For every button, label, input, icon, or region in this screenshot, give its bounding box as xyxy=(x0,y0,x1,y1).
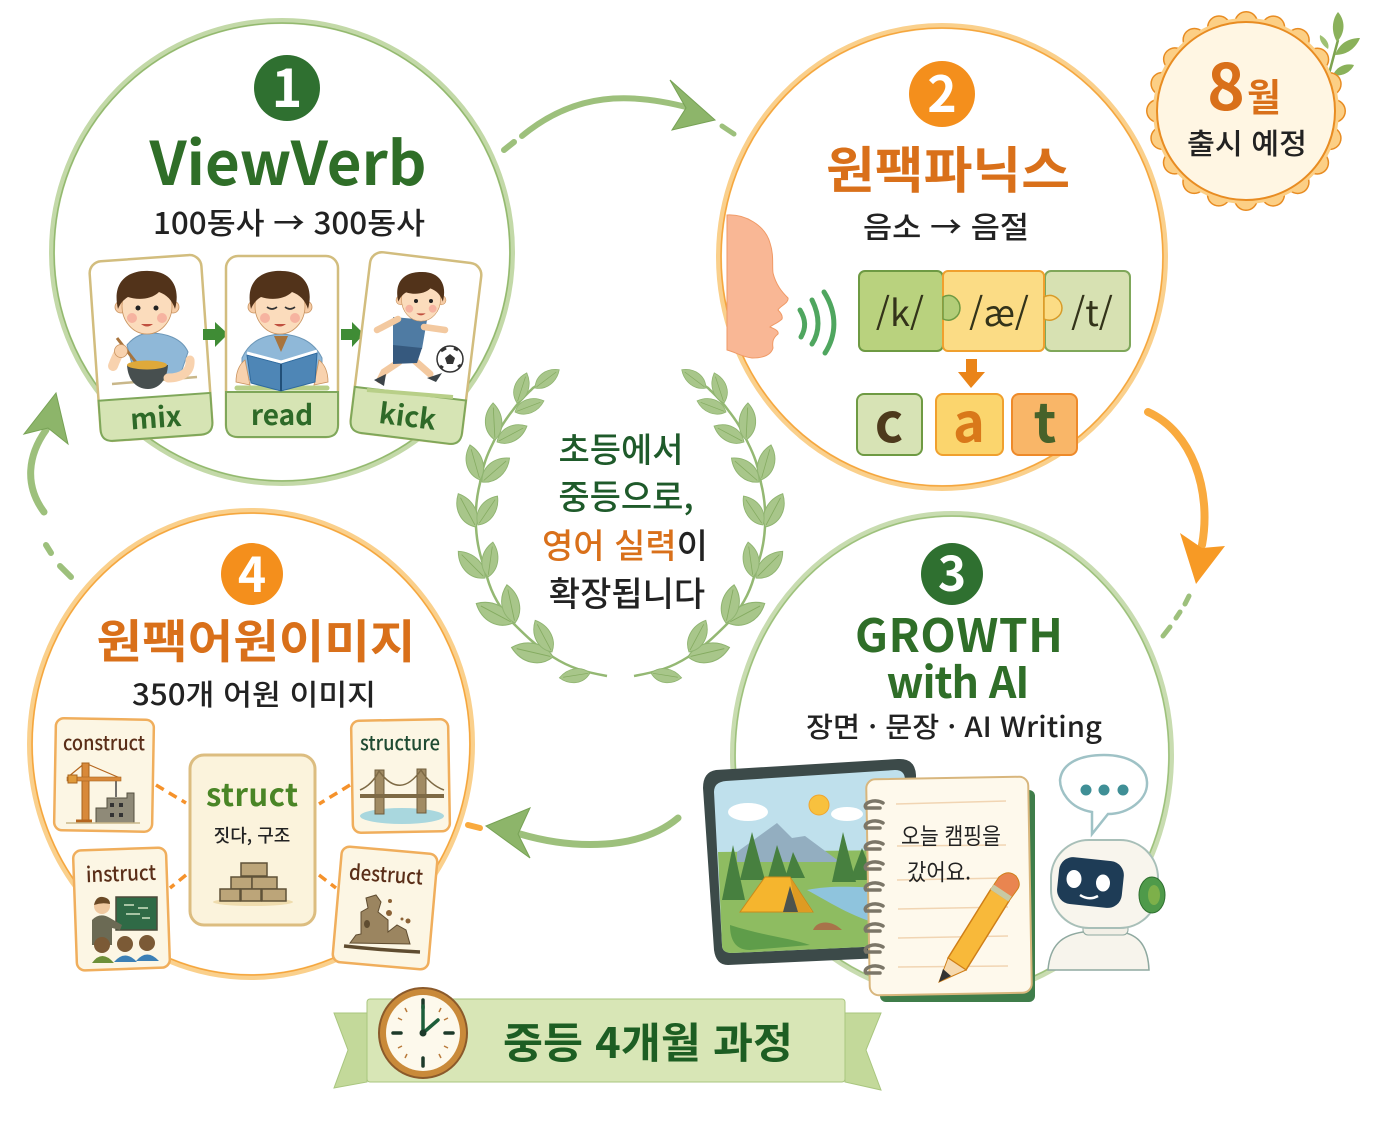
icon: badge leaves xyxy=(1320,12,1360,85)
icon: bricks xyxy=(213,863,293,906)
arrow: phoneme to letter xyxy=(958,359,985,388)
tile: a: a xyxy=(953,379,985,458)
center message: 영어 실력이 xyxy=(542,519,708,568)
card: construct xyxy=(54,718,154,832)
banner: course length xyxy=(334,988,881,1090)
icon: crane and building xyxy=(66,763,140,823)
step 4 subtitle: 350개 어원 이미지 xyxy=(132,672,376,714)
card: read xyxy=(226,256,338,437)
tile: c: c xyxy=(875,379,903,458)
card: instruct: instruct xyxy=(85,857,156,889)
step 4 title: 원팩어원이미지 xyxy=(96,606,415,672)
connectors xyxy=(156,785,350,888)
step 4 number: 4 xyxy=(238,536,266,606)
step 1 number xyxy=(254,47,320,122)
tile: t: t xyxy=(1034,379,1056,458)
card: struct: 짓다, 구조 xyxy=(214,822,290,848)
icon: speech bubble xyxy=(1060,755,1147,834)
step 1 title: ViewVerb xyxy=(148,116,426,203)
notebook xyxy=(865,777,1035,1002)
arrow: mix to read xyxy=(203,322,228,347)
card: destruct: destruct xyxy=(348,856,424,892)
step 3 number: 3 xyxy=(938,535,966,605)
banner: course length: 중등 4개월 과정 xyxy=(503,1010,793,1071)
card: structure: structure xyxy=(360,727,440,756)
laurel: left branch xyxy=(450,364,607,685)
puzzle: phonemes: /k/ xyxy=(876,285,924,337)
card: mix xyxy=(89,254,213,442)
ring: GROWTH with AI xyxy=(733,514,1171,996)
step 1 number: 1 xyxy=(272,47,302,122)
step 4 number xyxy=(221,536,283,606)
center message: 초등에서 xyxy=(558,423,684,472)
card: instruct xyxy=(73,847,170,971)
center message: 확장됩니다 xyxy=(549,567,705,616)
arrow: step 3 to step 4 xyxy=(468,808,678,858)
icon: pencil xyxy=(939,873,1019,982)
ring: ViewVerb xyxy=(52,21,512,483)
puzzle: phonemes: /t/ xyxy=(1071,285,1113,337)
arrow: step 1 to step 2 xyxy=(504,80,734,150)
tile: a xyxy=(936,379,1003,458)
center message: 중등으로, xyxy=(558,470,694,519)
arrow: step 4 to step 1 xyxy=(24,393,71,577)
card: struct: struct xyxy=(206,770,298,815)
card: read: read xyxy=(251,394,313,434)
puzzle: phonemes xyxy=(859,271,1130,351)
step 2 subtitle: 음소 → 음절 xyxy=(863,203,1029,247)
icon: bridge xyxy=(360,769,444,824)
tile: t xyxy=(1012,379,1077,458)
icon: clock xyxy=(379,988,467,1078)
card: mix: mix xyxy=(129,395,183,439)
laurel: right branch xyxy=(634,364,791,685)
ring: 원팩파닉스 xyxy=(719,26,1165,488)
card: kick xyxy=(349,251,483,445)
step 2 number: 2 xyxy=(927,55,957,127)
center message xyxy=(542,423,708,616)
card: structure xyxy=(351,719,450,833)
badge: August release xyxy=(1153,18,1339,204)
tile: c xyxy=(857,379,922,458)
step 1 subtitle: 100동사 → 300동사 xyxy=(153,199,425,243)
badge: August release: 월 xyxy=(1247,67,1281,122)
step 3 number xyxy=(921,535,983,605)
card: construct: construct xyxy=(63,727,145,756)
tablet with camping scene xyxy=(703,759,916,965)
step 3 title: with AI xyxy=(886,649,1030,711)
step 3 subtitle: 장면 · 문장 · AI Writing xyxy=(806,706,1102,746)
boy kicking xyxy=(367,272,463,397)
badge: August release: 8 xyxy=(1207,37,1245,129)
card: kick: kick xyxy=(377,392,439,439)
step 2 number xyxy=(909,55,975,127)
icon: teacher and students xyxy=(92,897,159,963)
step 3 title xyxy=(855,600,1063,711)
notebook: 갔어요. xyxy=(907,853,971,887)
arrow: step 2 to step 3 xyxy=(1148,412,1225,636)
icon: sound waves xyxy=(800,292,834,353)
step 2 title: 원팩파닉스 xyxy=(826,131,1070,203)
arrow: read to kick xyxy=(341,322,364,347)
card: struct xyxy=(190,755,315,925)
icon: robot xyxy=(1048,840,1165,970)
badge: August release: 출시 예정 xyxy=(1187,121,1307,163)
step 3 title: GROWTH xyxy=(855,600,1063,666)
card: destruct xyxy=(332,846,438,970)
ring: 원팩어원이미지 xyxy=(30,511,472,977)
notebook: 오늘 캠핑을 xyxy=(901,817,1001,851)
puzzle: phonemes: /æ/ xyxy=(969,285,1029,337)
icon: speaking face xyxy=(727,215,788,358)
boy reading xyxy=(236,271,328,391)
boy mixing xyxy=(112,271,197,389)
icon: ruins xyxy=(344,895,420,952)
